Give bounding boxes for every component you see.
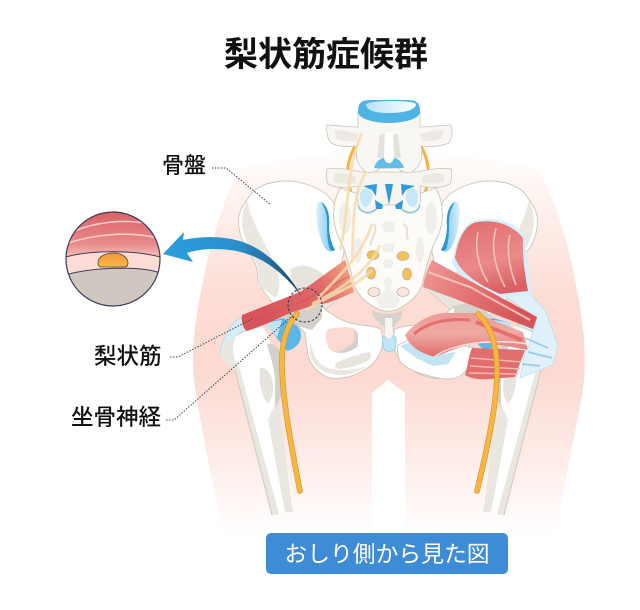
caption button [266,533,508,574]
coccyx and pubic symphysis [372,310,402,352]
sciatic nerve roots behind vertebrae [348,143,428,198]
right piriformis muscle [423,260,537,329]
pelvis bones [220,181,556,515]
right sciatic nerve [477,314,497,491]
label: sciatic nerve: 坐骨神経 [71,405,161,430]
right lower bone base [398,335,474,379]
arrow to inset [163,232,302,297]
left half of pelvis and femur [220,181,382,515]
body silhouette [193,153,585,533]
title: 梨状筋症候群 [224,36,428,74]
right half of pelvis and femur [394,181,556,515]
L5 vertebra [326,168,452,213]
inset: cross section of piriformis [66,212,160,306]
lumbar vertebrae [326,100,452,213]
leader lines [166,168,292,420]
faint nerve branches over sacrum [306,133,380,310]
left sciatic nerve [282,314,300,491]
right gluteus medius muscle [452,219,532,298]
right lower muscles [400,291,558,379]
L4 vertebra [327,112,452,173]
dashed focus circle [288,288,322,322]
left piriformis muscle [242,260,354,331]
caption button: おしり側から見た図 [284,541,490,567]
sacrum [334,188,442,311]
label: pelvis: 骨盤 [162,153,206,178]
label: piriformis: 梨状筋 [94,344,162,369]
sacral foramina [366,250,412,296]
intervertebral disc [358,100,420,123]
